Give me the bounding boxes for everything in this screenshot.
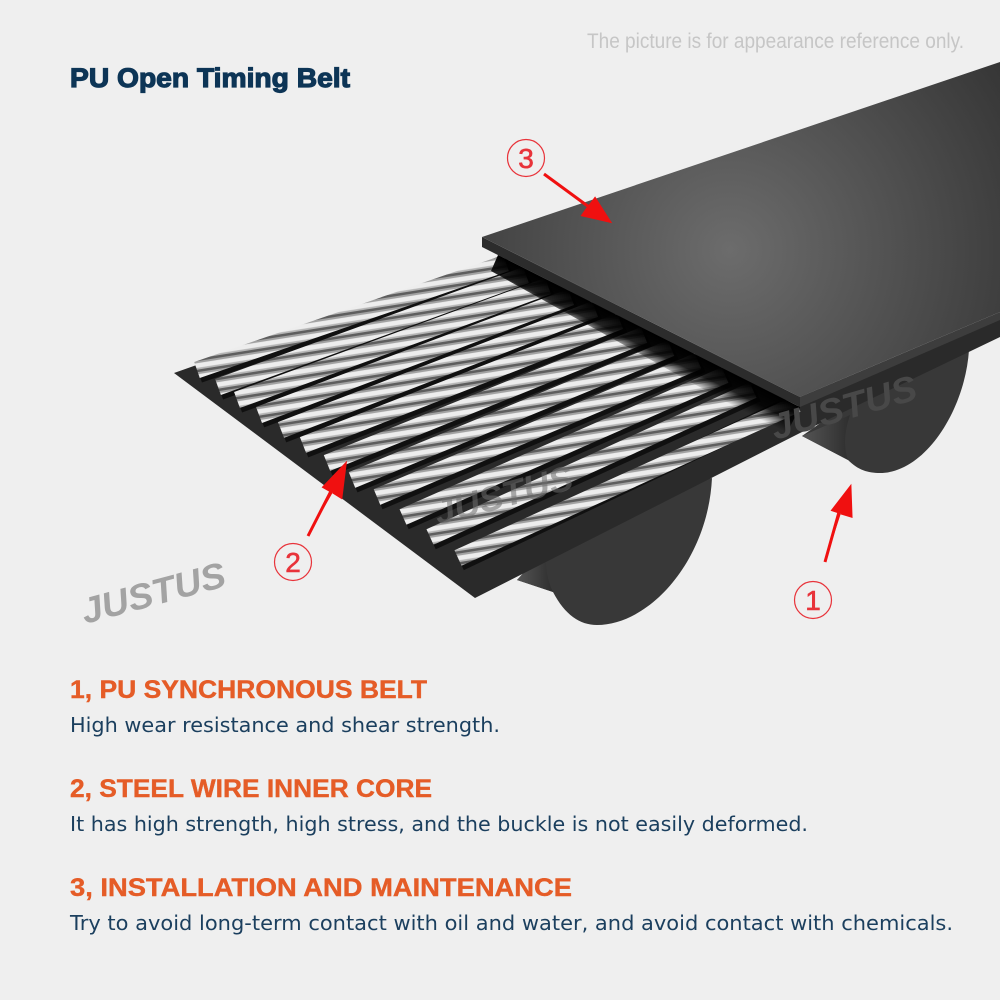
arrow 3 [544, 174, 609, 221]
callout 3: 3 [518, 143, 534, 174]
marker 2 [274, 544, 312, 580]
description 2: It has high strength, high stress, and the buckle is not easily deformed. [70, 812, 808, 836]
arrow 1 [825, 488, 851, 562]
top belt plate side edge [800, 312, 1000, 407]
marker 1 [794, 582, 832, 618]
heading 1: 1, PU SYNCHRONOUS BELT [70, 676, 427, 704]
watermark: centre: JUSTUS [430, 458, 577, 533]
callout 1: 1 [805, 585, 821, 616]
belt tooth: right side face [802, 415, 850, 460]
heading 3: 3, INSTALLATION AND MAINTENANCE [70, 874, 572, 902]
steel wire core [197, 263, 797, 562]
belt illustration [174, 62, 1000, 625]
callout 3 [508, 140, 609, 221]
shadow under top plate [491, 255, 800, 435]
heading 2: 2, STEEL WIRE INNER CORE [70, 775, 432, 803]
top belt plate [482, 62, 1000, 397]
description 1: High wear resistance and shear strength. [70, 713, 500, 737]
belt tooth: left [517, 478, 712, 625]
belt tooth: left side face [517, 545, 553, 592]
description 3: Try to avoid long-term contact with oil and water, and avoid contact with chemicals. [69, 911, 953, 935]
watermark: left: JUSTUS [76, 554, 230, 632]
belt base strip [174, 258, 1000, 598]
wires [197, 263, 797, 558]
arrow 2 [308, 465, 345, 536]
title: PU Open Timing Belt [70, 63, 350, 93]
watermark: right: JUSTUS [766, 367, 921, 448]
disclaimer note: The picture is for appearance reference only. [587, 30, 964, 53]
wire shadows [199, 266, 785, 562]
callout 1 [794, 488, 851, 618]
item 1 [70, 676, 500, 737]
item 2 [70, 775, 808, 836]
callout 2: 2 [285, 547, 301, 578]
item 3 [69, 874, 953, 935]
marker 3 [508, 140, 544, 176]
top belt plate front edge [482, 237, 800, 407]
callout 2 [274, 465, 345, 580]
belt tooth: right [802, 350, 969, 473]
